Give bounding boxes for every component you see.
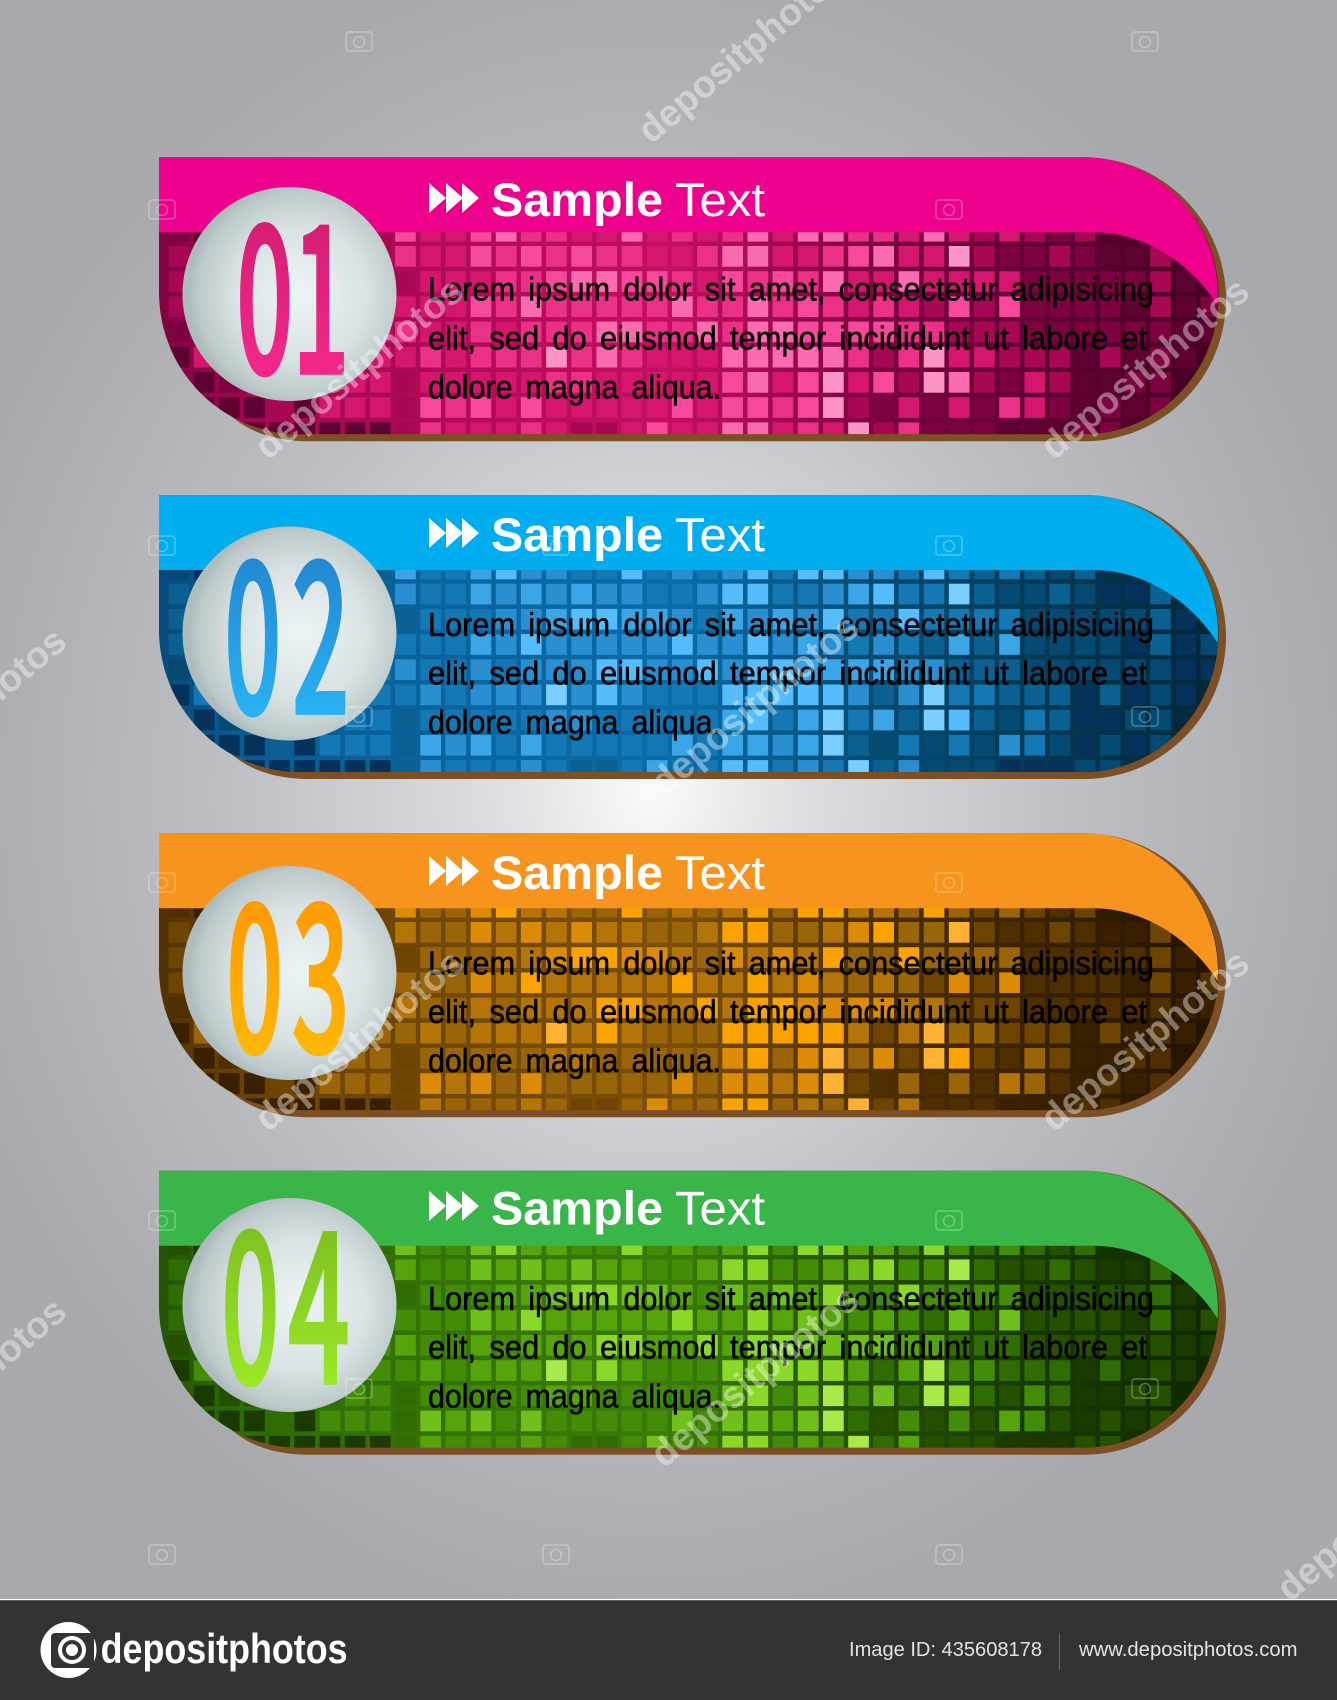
brown edge — [159, 495, 1226, 779]
body text 04: Lorem ipsum dolor sit amet, consectetur adipisicing — [428, 1280, 1154, 1317]
header flap — [159, 833, 1218, 981]
icon: triple arrows — [429, 856, 479, 886]
body text 01: Lorem ipsum dolor sit amet, consectetur adipisicing — [428, 271, 1154, 308]
website: www.depositphotos.com — [1078, 1639, 1298, 1661]
number badge 02 — [182, 475, 396, 771]
watermark: depositphotos — [247, 270, 472, 468]
heading 01: Text — [675, 173, 765, 226]
body text 03: Lorem ipsum dolor sit amet, consectetur adipisicing — [428, 944, 1154, 982]
body text 01: dolore magna aliqua. — [428, 368, 721, 405]
heading 01 — [429, 173, 765, 226]
heading 02: Sample — [491, 508, 663, 561]
body text 02: dolore magna aliqua. — [428, 704, 721, 741]
heading 02: Text — [675, 508, 765, 561]
mosaic — [159, 555, 1226, 781]
body text 01 — [428, 271, 1154, 405]
icon: triple arrows — [429, 183, 479, 213]
heading 04: Text — [675, 1182, 765, 1234]
number badge 03: 3 — [293, 819, 349, 1108]
watermark: depositphotos — [1033, 270, 1258, 468]
watermark: depositphotos — [1033, 942, 1258, 1140]
header flap — [159, 1171, 1218, 1319]
body text 02: elit, sed do eiusmod tempor incididunt ut labore et — [428, 655, 1147, 692]
heading 01: Sample — [491, 173, 663, 226]
heading 03: Sample — [491, 846, 663, 899]
header flap — [159, 495, 1218, 643]
panel: 02 blue banner — [159, 495, 1226, 781]
body text 02: Lorem ipsum dolor sit amet, consectetur adipisicing — [428, 606, 1154, 643]
number badge 04 — [182, 1143, 396, 1441]
number badge 01: 0 — [237, 140, 293, 429]
watermark: depositphotos — [643, 1278, 868, 1476]
number badge 01 — [182, 140, 396, 429]
icon: camera logo — [40, 1622, 96, 1678]
mosaic — [159, 1231, 1226, 1456]
body text 03: elit, sed do eiusmod tempor incididunt ut labore et — [428, 993, 1147, 1030]
brown edge — [159, 833, 1226, 1117]
number badge 04: 0 — [222, 1143, 279, 1441]
panel: 03 orange banner — [159, 833, 1226, 1119]
heading 04: Sample — [491, 1182, 663, 1234]
header flap — [159, 157, 1218, 305]
heading 03: Text — [675, 846, 765, 899]
watermark: depositphotos — [643, 606, 868, 804]
mosaic — [159, 217, 1226, 443]
icon: triple arrows — [429, 518, 479, 548]
logo wordmark: depositphotos — [101, 1625, 348, 1672]
body text 01: elit, sed do eiusmod tempor incididunt ut labore et — [428, 319, 1147, 356]
image id: Image ID: 435608178 — [849, 1639, 1042, 1661]
mosaic — [159, 893, 1226, 1119]
brown edge — [159, 157, 1226, 441]
icon: triple arrows — [429, 1191, 479, 1221]
heading 03 — [429, 846, 765, 899]
panel: 04 green banner — [159, 1171, 1226, 1456]
watermark: depositphotos — [247, 942, 472, 1140]
body text 02 — [428, 606, 1154, 741]
body text 04 — [428, 1280, 1154, 1415]
heading 04 — [429, 1182, 765, 1234]
number badge 03 — [182, 819, 396, 1108]
number badge 02: 0 — [225, 475, 281, 771]
heading 02 — [429, 508, 765, 561]
body text 03 — [428, 944, 1154, 1079]
footer bar — [0, 1599, 1337, 1700]
number badge 03: 0 — [227, 819, 283, 1108]
number badge 04: 4 — [289, 1145, 349, 1441]
brown edge — [159, 1171, 1226, 1455]
panel: 01 pink banner — [159, 157, 1226, 443]
body text 04: elit, sed do eiusmod tempor incididunt ut labore et — [428, 1329, 1147, 1366]
body text 03: dolore magna aliqua. — [428, 1042, 721, 1079]
number badge 02: 2 — [293, 475, 349, 771]
body text 04: dolore magna aliqua. — [428, 1378, 721, 1415]
number badge 01: 1 — [293, 140, 349, 429]
